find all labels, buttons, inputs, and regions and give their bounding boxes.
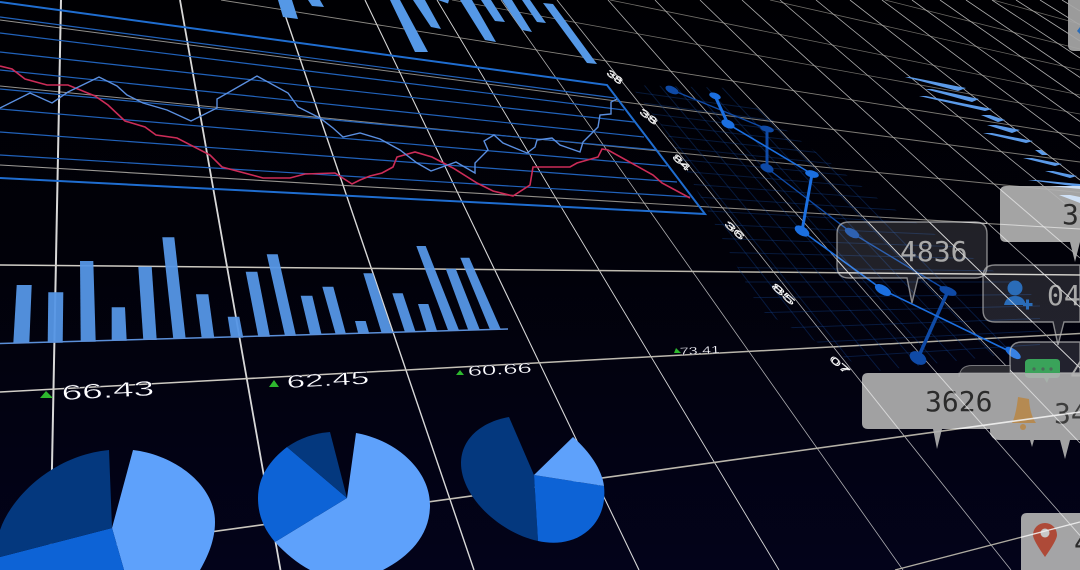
callout: 4836 [837,222,987,303]
callout: messages [1010,342,1080,388]
stat: 62.45: 62.45 [286,367,370,392]
axis labels along chart edge: 38 [637,107,660,127]
bar chart: top hanging bars [278,0,597,64]
callout: notifications [959,366,1080,459]
icon: green chat bubble [1025,359,1060,383]
stat: 66.43: 66.43 [61,377,155,405]
axis labels along chart edge: 36 [722,220,746,242]
callout: 3 [1000,186,1080,262]
bar chart: main blue bars [0,237,508,344]
panel: dim blue grid behind dumbbell chart [635,85,1040,371]
axis labels along chart edge [605,67,851,377]
stat: 60.66: 60.66 [467,360,532,379]
icon: map pin [1033,523,1057,557]
chart horizontal rules [0,17,690,197]
stat: 73.41: 73.41 [680,344,720,357]
callout: top right corner [1068,0,1080,51]
callout: 3626: 3626 [925,385,992,418]
red series [0,66,690,198]
bar chart: upper right thin bars [905,77,1080,187]
axis labels along chart edge: 38 [605,67,625,86]
bar chart baseline [0,329,508,344]
callout: user count: 04 [1047,279,1080,312]
pie chart 1 [0,450,215,570]
chart frame [0,2,705,214]
callout: location [1021,513,1080,570]
axis labels along chart edge: 84 [670,152,692,173]
axis labels along chart edge: 85 [769,281,797,308]
callout: 3626 [862,373,1012,449]
callout: 3: 3 [1062,198,1079,231]
pie chart 2 [258,432,430,570]
icon: user plus [1004,280,1032,310]
bright series [708,91,1023,361]
callout: 4836: 4836 [900,235,967,268]
dark series [664,84,958,368]
icon: bell [1012,397,1036,430]
callout: user count [983,265,1080,345]
blue series [0,76,617,173]
dumbbell line chart [664,84,1023,368]
line chart panel [0,2,705,214]
axis labels along chart edge: 07 [828,354,851,377]
pie chart 3 [461,417,604,543]
